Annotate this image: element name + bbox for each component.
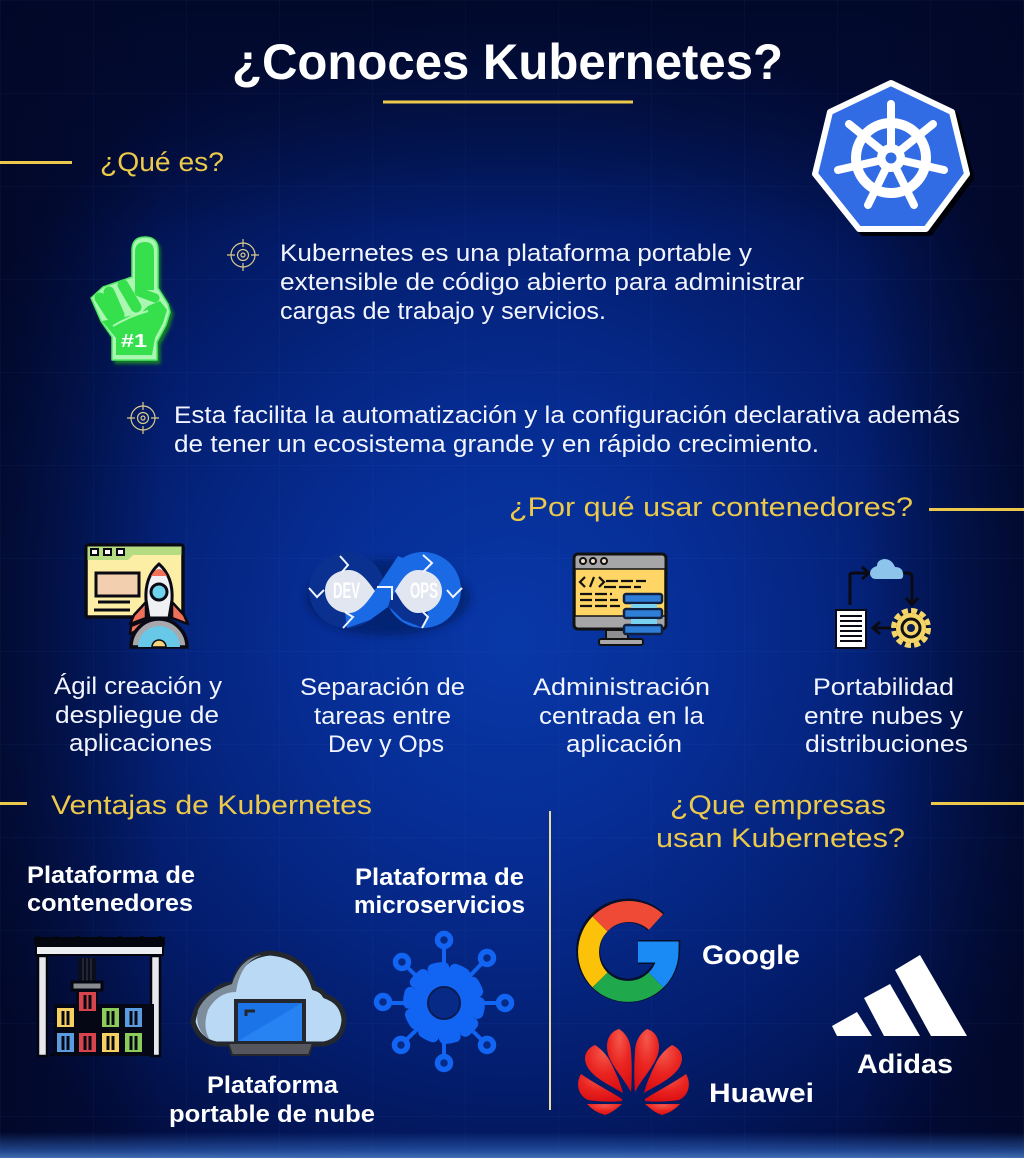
- text: ágil creación: despliegue de: [55, 702, 219, 729]
- section: empresas: [578, 790, 1024, 1115]
- heading: por qué usar contenedores: [509, 492, 1024, 522]
- icon: container crane: [34, 936, 165, 1056]
- label: adidas: Adidas: [857, 1049, 953, 1079]
- text: definition paragraph: Kubernetes es una plataforma portable y: [280, 240, 752, 267]
- icon: huawei logo: [578, 1029, 689, 1115]
- icon: google logo: [588, 911, 668, 991]
- icon: devops loop: [306, 552, 470, 636]
- label: plataforma portable de nube: [169, 1072, 375, 1128]
- icon: foam finger: [91, 237, 174, 364]
- icon: foam finger: #1: [121, 331, 147, 351]
- icon: kubernetes logo: [815, 83, 971, 233]
- text: administración centrada: centrada en la: [539, 703, 705, 730]
- icon: monitor with code and servers: [574, 554, 666, 645]
- label: plataforma de contenedores: [27, 862, 195, 917]
- icon: rocket over window: [86, 545, 188, 647]
- text: separación de tareas: tareas entre: [314, 703, 451, 730]
- icon: cloud portability cycle: [836, 559, 928, 648]
- text: administración centrada: [533, 674, 710, 758]
- text: portabilidad: [804, 674, 968, 758]
- label: plataforma de contenedores: Plataforma de: [27, 862, 195, 889]
- text: ecosystem paragraph: de tener un ecosistema grande y en rápido crecimiento.: [174, 431, 819, 458]
- label: plataforma portable de nube: portable de nube: [169, 1101, 375, 1128]
- heading: por qué usar contenedores: ¿Por qué usar contenedores?: [509, 492, 913, 522]
- section: por qué usar contenedores: [54, 492, 1024, 758]
- label: google: Google: [702, 940, 800, 970]
- text: portabilidad: entre nubes y: [804, 703, 963, 730]
- text: administración centrada: Administración: [533, 674, 710, 701]
- label: plataforma de microservicios: Plataforma de: [355, 864, 524, 891]
- text: separación de tareas: Dev y Ops: [328, 731, 444, 758]
- heading: qué empresas: ¿Que empresas: [670, 790, 886, 820]
- text: ágil creación: Ágil creación y: [54, 673, 222, 700]
- text: administración centrada: aplicación: [566, 731, 682, 758]
- label: plataforma de contenedores: contenedores: [27, 890, 193, 917]
- text: ágil creación: aplicaciones: [69, 730, 212, 757]
- icon: target bullet 2: [127, 402, 159, 434]
- heading: qué empresas: usan Kubernetes?: [656, 823, 905, 853]
- heading: qué es: ¿Qué es?: [100, 147, 224, 177]
- icon: devops loop: DEV: [333, 578, 360, 603]
- heading: qué es: [0, 147, 224, 177]
- text: separación de tareas: Separación de: [300, 674, 465, 701]
- label: huawei: Huawei: [709, 1078, 814, 1108]
- title: ¿Conoces Kubernetes?: [232, 34, 783, 90]
- text: definition paragraph: [280, 240, 804, 325]
- text: ecosystem paragraph: [174, 402, 960, 458]
- section: ventajas de kubernetes: [0, 790, 525, 1128]
- heading: ventajas: Ventajas de Kubernetes: [51, 790, 372, 820]
- icon: microservices gear: [376, 934, 512, 1070]
- icon: adidas logo: [832, 955, 967, 1036]
- text: definition paragraph: extensible de código abierto para administrar: [280, 269, 804, 296]
- text: definition paragraph: cargas de trabajo y servicios.: [280, 298, 606, 325]
- text: separación de tareas: [300, 674, 465, 758]
- label: plataforma de microservicios: [354, 864, 525, 919]
- label: plataforma portable de nube: Plataforma: [207, 1072, 339, 1099]
- section: qué es: [0, 147, 960, 458]
- label: plataforma de microservicios: microservicios: [354, 892, 525, 919]
- divider: [549, 811, 551, 1110]
- heading: qué empresas: [656, 790, 1024, 853]
- text: portabilidad: distribuciones: [805, 731, 968, 758]
- icon: cloud with laptop: [193, 953, 344, 1055]
- text: ecosystem paragraph: Esta facilita la automatización y la configuración declarativa además: [174, 402, 960, 429]
- icon: target bullet 1: [227, 239, 259, 271]
- text: ágil creación: [54, 673, 222, 757]
- text: portabilidad: Portabilidad: [813, 674, 954, 701]
- icon: devops loop: OPS: [410, 578, 438, 603]
